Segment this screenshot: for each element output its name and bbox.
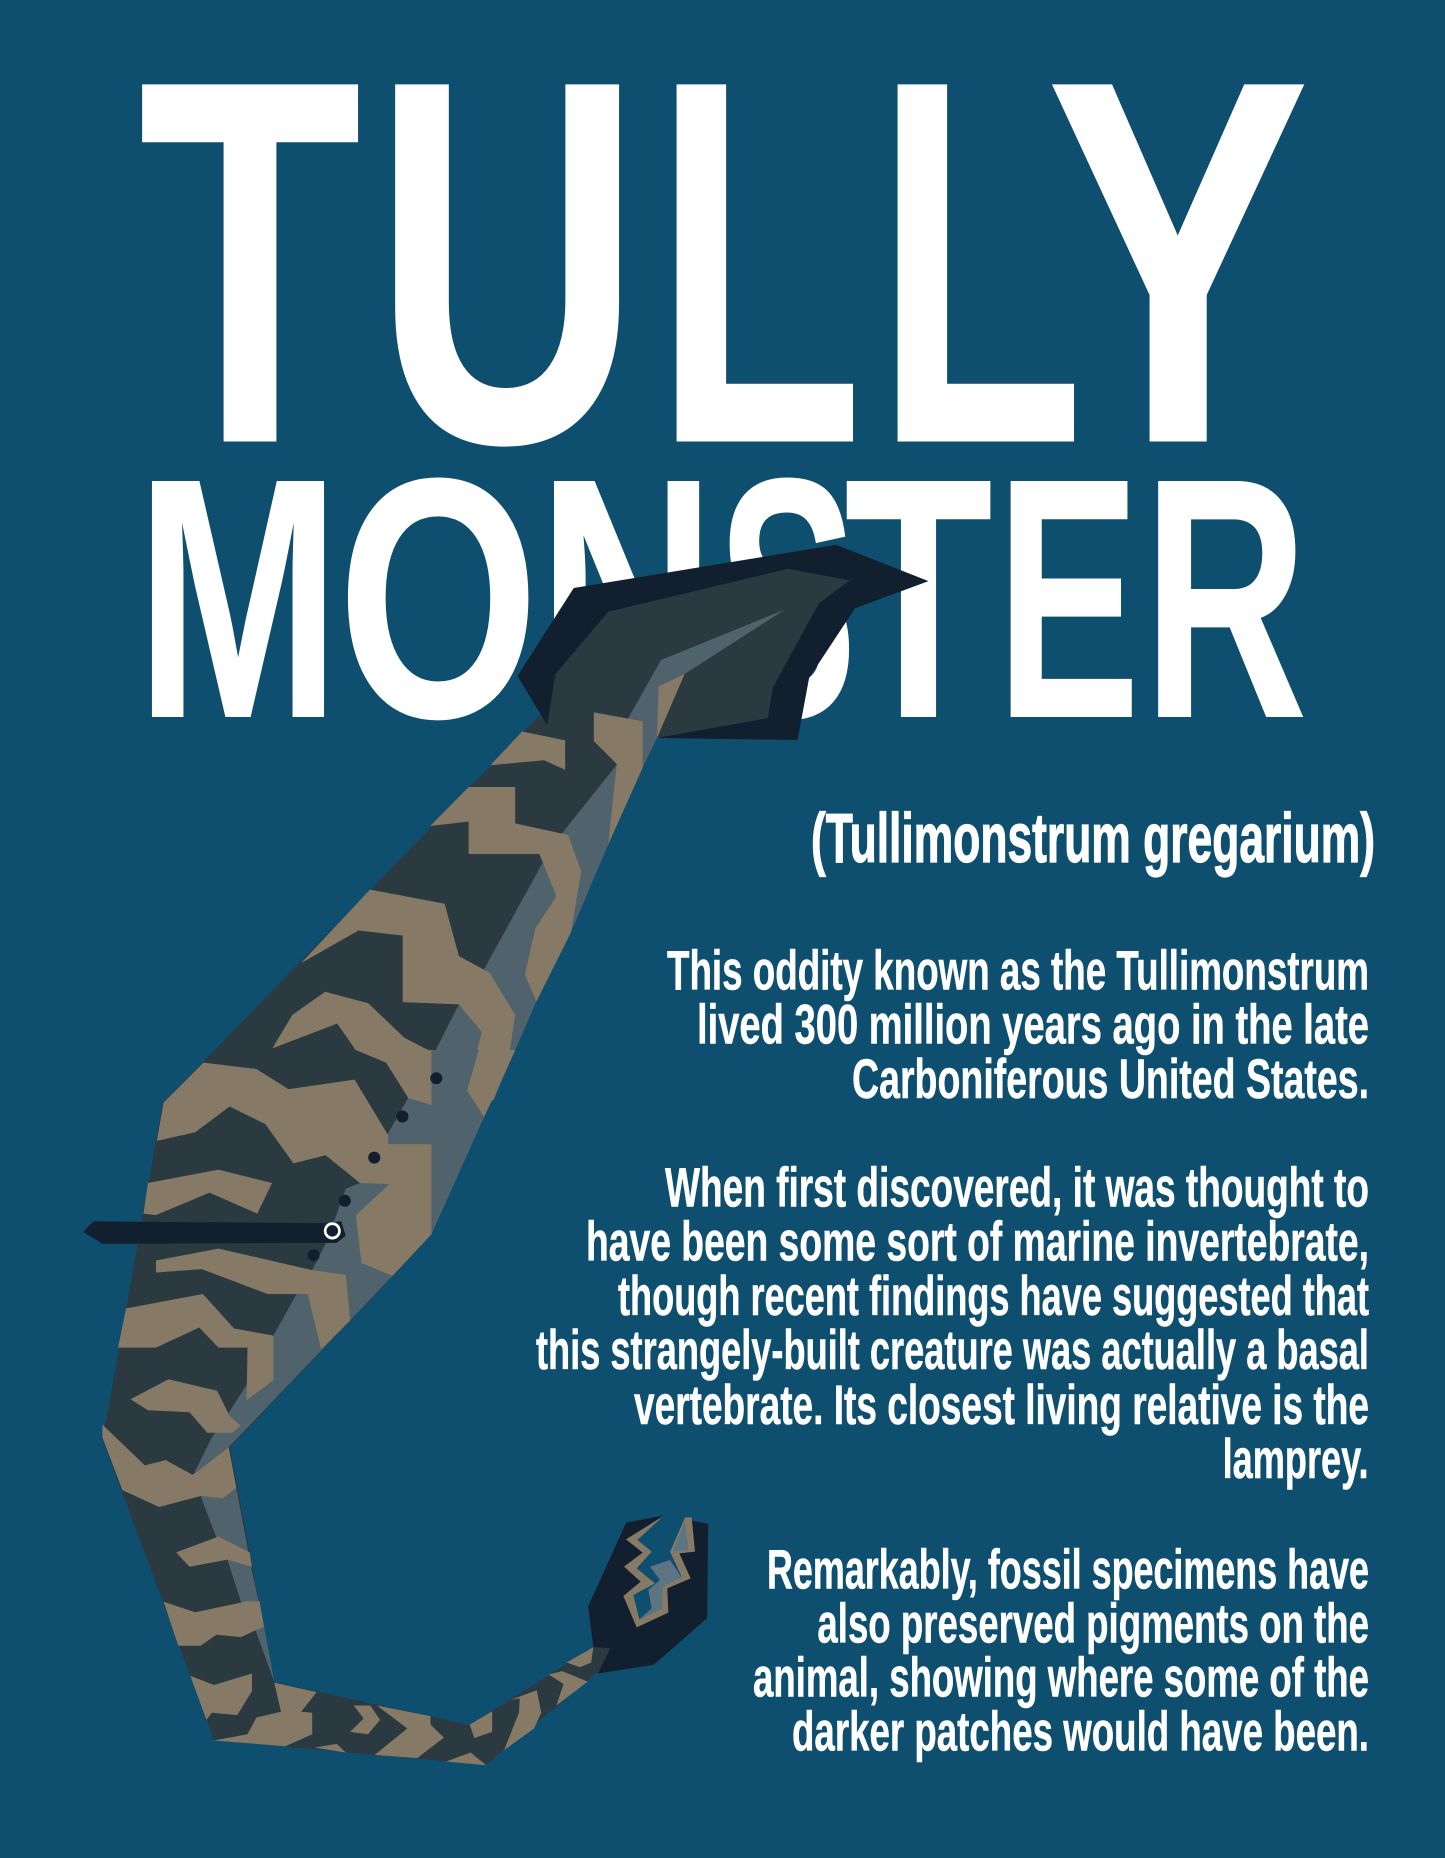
side bar — [83, 1221, 346, 1244]
paragraph: classification: lamprey. — [1223, 1427, 1369, 1490]
pod jaw pattern — [623, 1516, 695, 1627]
illustration: Tully monster — [83, 545, 928, 1765]
tail-end pod — [588, 1516, 708, 1673]
title line: MONSTER: E — [996, 406, 1140, 790]
paragraph: classification — [536, 1156, 1369, 1490]
jaw grey patches — [639, 1521, 688, 1619]
upper grey stripe — [430, 610, 784, 1100]
body silhouette — [102, 716, 657, 1765]
eye spots — [308, 1072, 442, 1261]
lower tan markings — [102, 1050, 593, 1765]
title line: MONSTER: R — [1143, 406, 1308, 790]
paragraph: pigments — [753, 1538, 1369, 1762]
tail grey stripe — [201, 1488, 274, 1682]
title line: MONSTER: M — [136, 406, 340, 790]
paragraph: age of the creature — [667, 938, 1369, 1110]
title line: MONSTER: N — [538, 406, 716, 790]
head inner — [547, 569, 850, 738]
jaw tan outline — [623, 1516, 695, 1627]
head and upper body markings — [166, 545, 928, 1100]
title line: MONSTER: S — [717, 406, 857, 790]
title line: MONSTER: T — [844, 406, 993, 790]
lower body markings — [83, 1050, 708, 1765]
title line: MONSTER: O — [337, 406, 539, 790]
tail joint — [591, 1647, 610, 1673]
upper tan markings — [166, 674, 685, 1100]
lower grey stripe — [194, 1050, 515, 1473]
head outline — [517, 545, 928, 740]
title — [136, 0, 1311, 790]
jaw opening — [633, 1516, 685, 1619]
eye — [324, 1222, 341, 1239]
